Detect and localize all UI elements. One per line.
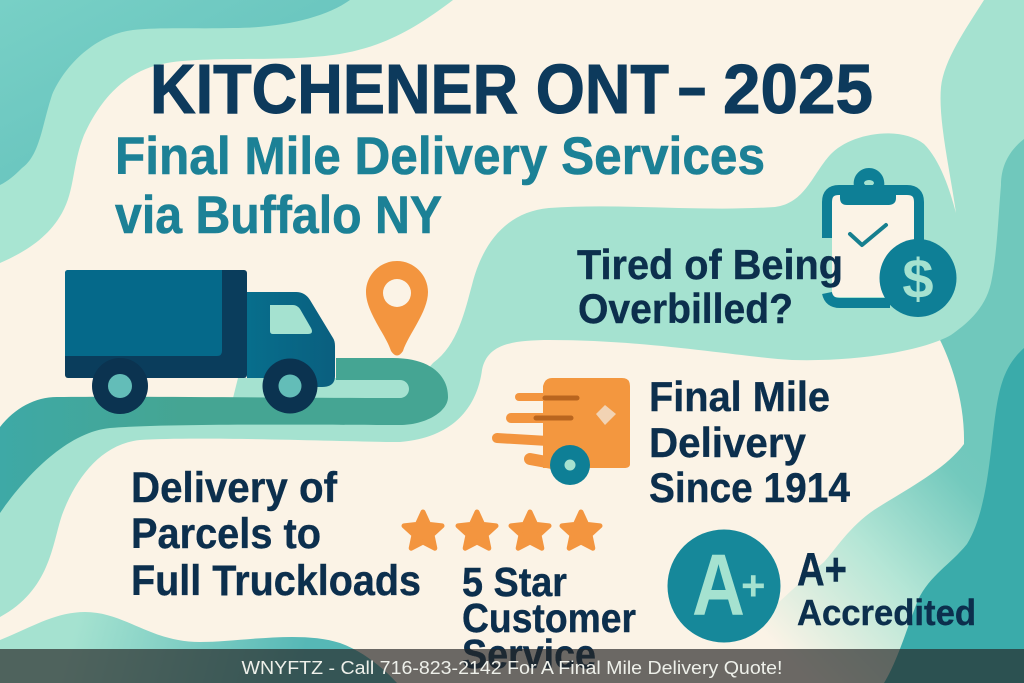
- background wave: top left mint: [0, 0, 453, 263]
- parcel stripes: [536, 398, 577, 418]
- text: final mile delivery since 1914: Delivery: [649, 419, 807, 466]
- rear wheel: [92, 358, 148, 414]
- text: delivery of parcels to full truckloads: Full Truckloads: [131, 557, 421, 605]
- truck cargo box: [65, 270, 247, 378]
- parcel box: [543, 378, 630, 468]
- icon: clipboard with dollar: [827, 168, 956, 317]
- road: [0, 358, 448, 513]
- text: delivery of parcels to full truckloads: Delivery of: [131, 464, 338, 512]
- text: tired of being overbilled: Overbilled?: [578, 285, 793, 332]
- background wave: top left teal: [0, 0, 350, 185]
- text: 5 star customer service: Service: [462, 631, 596, 677]
- background wave: right dark teal: [884, 348, 1024, 683]
- badge: A+: +: [741, 562, 766, 609]
- truck window: [270, 305, 312, 334]
- title: –: [678, 47, 706, 125]
- background wave: right teal: [690, 139, 1024, 683]
- clipboard clip: [840, 168, 896, 205]
- clipboard body: [832, 195, 914, 297]
- badge: A+: A: [692, 537, 745, 634]
- text: final mile delivery since 1914: Since 1914: [649, 464, 851, 511]
- text: delivery of parcels to full truckloads: [131, 464, 421, 605]
- text: 5 star customer service: 5 Star: [462, 559, 567, 605]
- badge: A+: [668, 530, 780, 642]
- title: KITCHENER ONT: [150, 50, 669, 128]
- front wheel: [262, 358, 318, 414]
- text: A+ accredited: [797, 543, 976, 633]
- title: 2025: [723, 50, 873, 128]
- text: delivery of parcels to full truckloads: Parcels to: [131, 510, 321, 558]
- icon: four stars: [404, 512, 600, 548]
- parcel wheel: [550, 445, 590, 485]
- text: tired of being overbilled: [577, 241, 843, 332]
- text: 5 star customer service: Customer: [462, 595, 636, 641]
- footer bar: [0, 649, 1024, 683]
- check mark: [850, 225, 886, 245]
- subtitle: Final Mile Delivery Services: [115, 127, 765, 186]
- clipboard outline: [827, 190, 919, 303]
- parcel label: [596, 405, 616, 425]
- icon: location pin: [366, 261, 428, 356]
- text: tired of being overbilled: Tired of Being: [577, 241, 843, 288]
- text: A+ accredited: A+: [797, 543, 847, 595]
- dollar badge: [880, 239, 956, 317]
- background wave: bottom left teal: [0, 612, 397, 683]
- speed lines: [497, 397, 552, 463]
- text: A+ accredited: Accredited: [797, 592, 976, 633]
- truck: [65, 270, 335, 414]
- dollar sign: $: [902, 247, 934, 310]
- subtitle: via Buffalo NY: [115, 186, 442, 245]
- truck cab: [247, 292, 335, 387]
- text: final mile delivery since 1914: [649, 373, 851, 511]
- background wave: right mid teal: [940, 130, 1024, 470]
- text: 5 star customer service: [462, 559, 636, 677]
- icon: fast delivery box: [497, 378, 630, 485]
- text: final mile delivery since 1914: Final Mile: [649, 373, 830, 420]
- subtitle: [115, 127, 765, 245]
- footer text: WNYFTZ - Call 716-823-2142 For A Final Mile Delivery Quote!: [242, 658, 782, 678]
